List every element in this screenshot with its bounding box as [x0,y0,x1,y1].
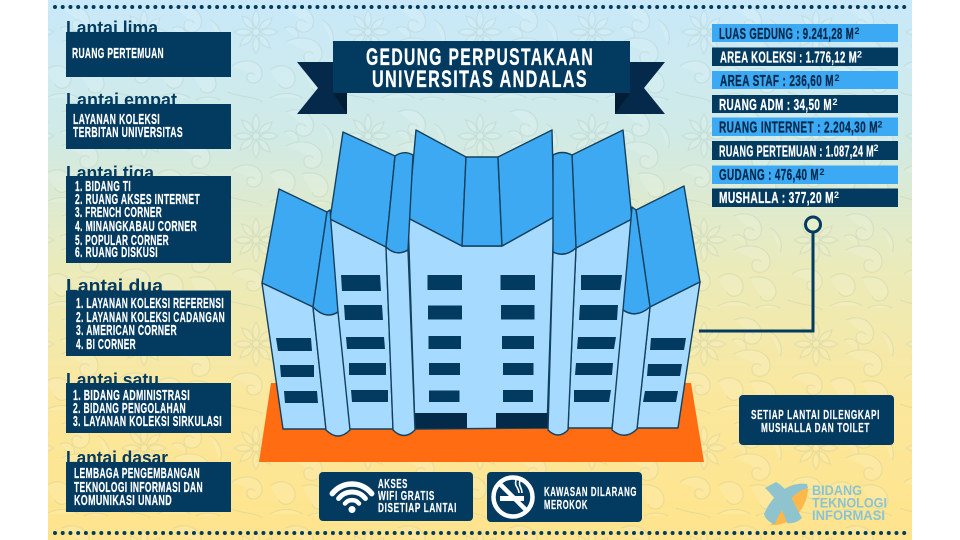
callout: wifi: WIFI GRATIS [378,488,435,503]
left inner spine [386,153,415,435]
callout: mushalla dan toilet: MUSHALLA DAN TOILET [761,420,870,435]
panel: lantai dasar: LEMBAGA PENGEMBANGAN [74,466,200,482]
panel: lantai satu: 1. BIDANG ADMINISTRASI [73,388,190,404]
panel: lantai tiga [66,163,231,263]
panel: area statistics [712,24,898,207]
logo: bidang teknologi informasi [764,482,887,525]
panel: lantai satu [66,370,231,433]
title [366,44,594,93]
stat: area staf: 2 [834,73,840,83]
panel: lantai tiga: 4. MINANGKABAU CORNER [75,219,197,235]
stat: mushalla: 2 [834,190,839,200]
stat: ruang pertemuan [712,141,898,160]
stat: ruang pertemuan: 2 [874,143,879,153]
callout: no smoking [487,472,642,522]
stat: ruang adm: 2 [832,97,838,107]
icon: ribbon x [764,482,808,525]
panel: lantai dasar: KOMUNIKASI UNAND [74,493,172,509]
orange base [259,383,704,462]
callout: no smoking: KAWASAN DILARANG [544,484,637,499]
callout: no smoking: MEROKOK [544,497,588,512]
panel: lantai lima: Lantai lima [66,18,159,38]
callout: wifi: AKSES [378,476,408,491]
stat: luas gedung: 2 [854,26,860,36]
panel: lantai tiga: 2. RUANG AKSES INTERNET [75,192,200,208]
icon: no smoking [494,478,532,516]
panel: floor directory [66,18,231,512]
icon: wifi [332,484,372,513]
panel: lantai dasar: TEKNOLOGI INFORMASI DAN [74,480,203,496]
panel: lantai lima [66,18,231,77]
far right wing [636,186,700,428]
right door [496,413,548,428]
title ribbon [297,41,665,114]
stat: area koleksi: 2 [857,50,862,60]
stat: luas gedung [712,24,898,43]
panel: lantai dua: 2. LAYANAN KOLEKSI CADANGAN [76,310,225,326]
right column windows [500,275,535,402]
panel: lantai dasar [66,448,231,512]
building illustration [262,130,700,436]
logo: bidang teknologi informasi: TEKNOLOGI [812,496,887,510]
panel: lantai tiga: Lantai tiga [66,163,155,183]
callout: mushalla dan toilet [739,395,894,445]
callout: wifi [319,472,473,521]
panel: lantai dasar: Lantai dasar [66,448,168,468]
second right wing [568,130,632,428]
stat: area koleksi: AREA KOLEKSI : 1.776,12 M [720,50,857,66]
dotted border top [55,5,906,9]
title: UNIVERSITAS ANDALAS [372,66,588,93]
panel: lantai empat: Lantai empat [66,90,177,110]
title: GEDUNG PERPUSTAKAAN [366,44,594,71]
far right spine [612,207,650,435]
far left spine [313,210,350,436]
stat: mushalla: MUSHALLA : 377,20 M [719,190,834,207]
logo: bidang teknologi informasi: BIDANG [812,483,862,498]
panel: lantai dua: Lantai dua [66,276,164,296]
second left wing [330,132,395,429]
panel: lantai tiga: 3. FRENCH CORNER [75,205,162,221]
stat: ruang internet: 2 [878,120,883,130]
left column windows [428,275,462,402]
panel: lantai dua: 4. BI CORNER [76,337,136,353]
left door [415,413,467,428]
far left wing [262,189,327,429]
panel: lantai lima: RUANG PERTEMUAN [72,46,164,62]
panel: lantai tiga: 6. RUANG DISKUSI [75,245,158,261]
panel: lantai empat: TERBITAN UNIVERSITAS [73,125,183,141]
stat: gudang: 2 [820,167,825,177]
stat: ruang adm: RUANG ADM : 34,50 M [719,97,832,114]
panel: lantai dua: 3. AMERICAN CORNER [76,323,177,339]
logo: bidang teknologi informasi: INFORMASI [812,508,885,523]
stat: gudang: GUDANG : 476,40 M [719,167,819,184]
dotted border bottom [55,531,906,535]
stat: area staf: AREA STAF : 236,60 M [720,73,834,90]
panel: lantai satu: Lantai satu [66,370,159,390]
panel: lantai satu: 2. BIDANG PENGOLAHAN [73,401,186,417]
central block [408,130,554,429]
right inner spine [548,152,576,435]
stat: area koleksi [712,48,898,66]
panel: lantai satu: 3. LAYANAN KOLEKSI SIRKULASI [73,414,222,430]
panel: lantai empat: LAYANAN KOLEKSI [73,112,160,128]
panel: lantai tiga: 5. POPULAR CORNER [75,233,169,249]
panel: lantai empat [66,90,231,149]
stat: ruang internet [712,118,898,136]
callout: wifi: DISETIAP LANTAI [378,500,457,515]
stat: luas gedung: LUAS GEDUNG : 9.241,28 M [719,26,854,43]
panel: lantai dua [66,276,231,356]
panel: lantai dua: 1. LAYANAN KOLEKSI REFERENSI [76,296,224,312]
panel: lantai tiga: 1. BIDANG TI [75,179,131,195]
connector line from stats to building [699,217,820,331]
callout: mushalla dan toilet: SETIAP LANTAI DILENGKAPI [751,407,880,422]
